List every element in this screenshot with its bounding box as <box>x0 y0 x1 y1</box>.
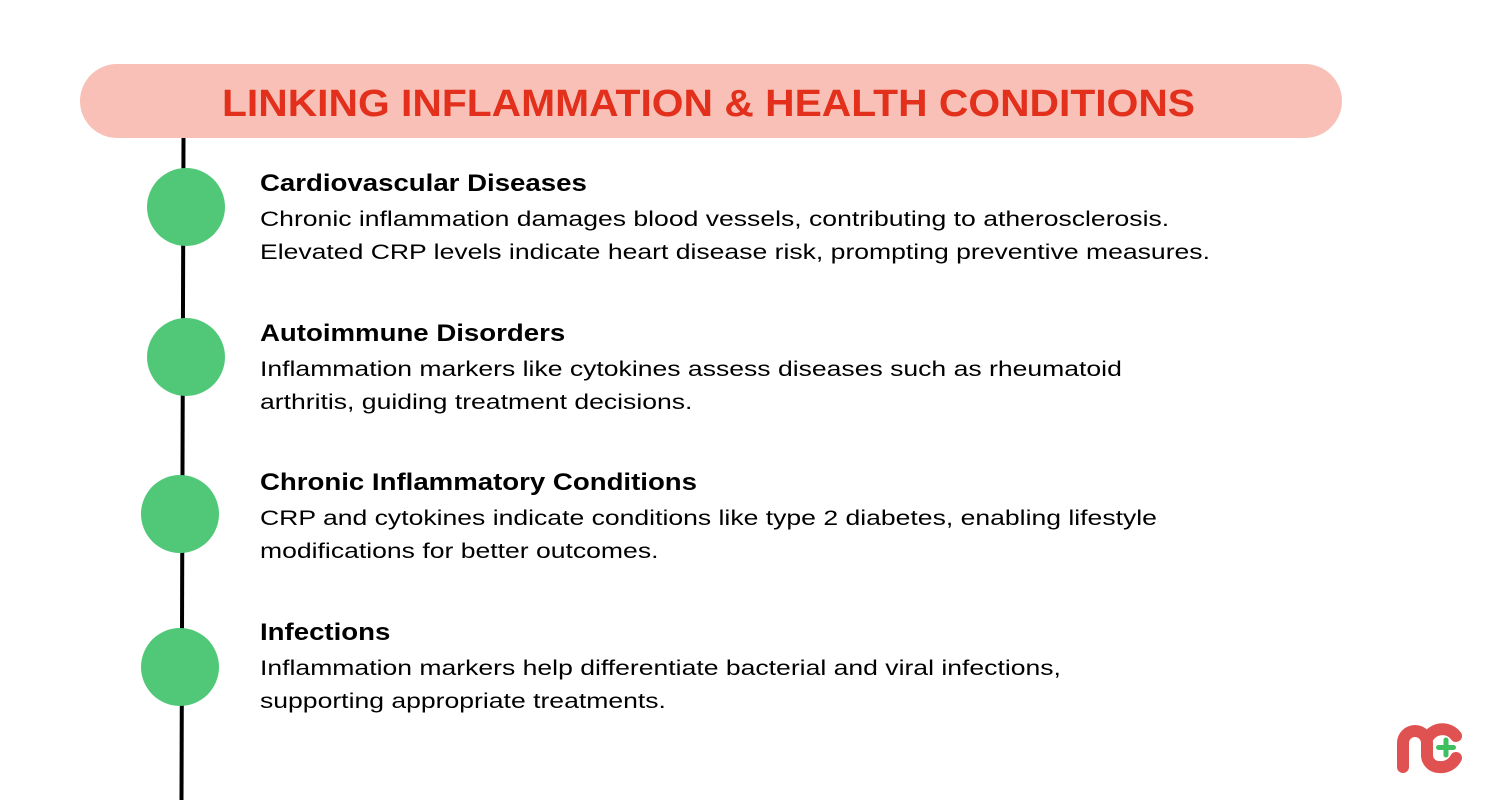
item: chronic inflammatory <box>260 469 1157 563</box>
item: autoimmune: Inflammation markers like cytokines assess diseases such as rheumatoid <box>260 357 1122 381</box>
item: infections <box>260 619 1061 713</box>
title banner <box>80 64 1342 138</box>
marker 1 <box>147 168 225 246</box>
marker 4 <box>141 628 219 706</box>
marker 2 <box>147 318 225 396</box>
item: autoimmune: arthritis, guiding treatment decisions. <box>260 390 692 414</box>
timeline line <box>180 138 186 800</box>
item: chronic inflammatory: Chronic Inflammatory Conditions <box>260 469 697 496</box>
item: infections: supporting appropriate treatments. <box>260 689 666 713</box>
item: cardiovascular: Cardiovascular Diseases <box>260 170 587 197</box>
item: cardiovascular: Chronic inflammation damages blood vessels, contributing to atherosclerosis. <box>260 207 1169 231</box>
marker 3 <box>141 475 219 553</box>
item: autoimmune <box>260 320 1122 414</box>
logo <box>1397 723 1462 774</box>
item: autoimmune: Autoimmune Disorders <box>260 320 565 347</box>
item: cardiovascular: Elevated CRP levels indicate heart disease risk, prompting preventive measures. <box>260 240 1210 264</box>
item: chronic inflammatory: modifications for better outcomes. <box>260 539 658 563</box>
item: chronic inflammatory: CRP and cytokines indicate conditions like type 2 diabetes, enabling lifestyle <box>260 506 1157 530</box>
title banner: LINKING INFLAMMATION & HEALTH CONDITIONS <box>222 83 1195 125</box>
item: infections: Infections <box>260 619 390 646</box>
item: infections: Inflammation markers help differentiate bacterial and viral infections, <box>260 656 1061 680</box>
item: cardiovascular <box>260 170 1210 264</box>
